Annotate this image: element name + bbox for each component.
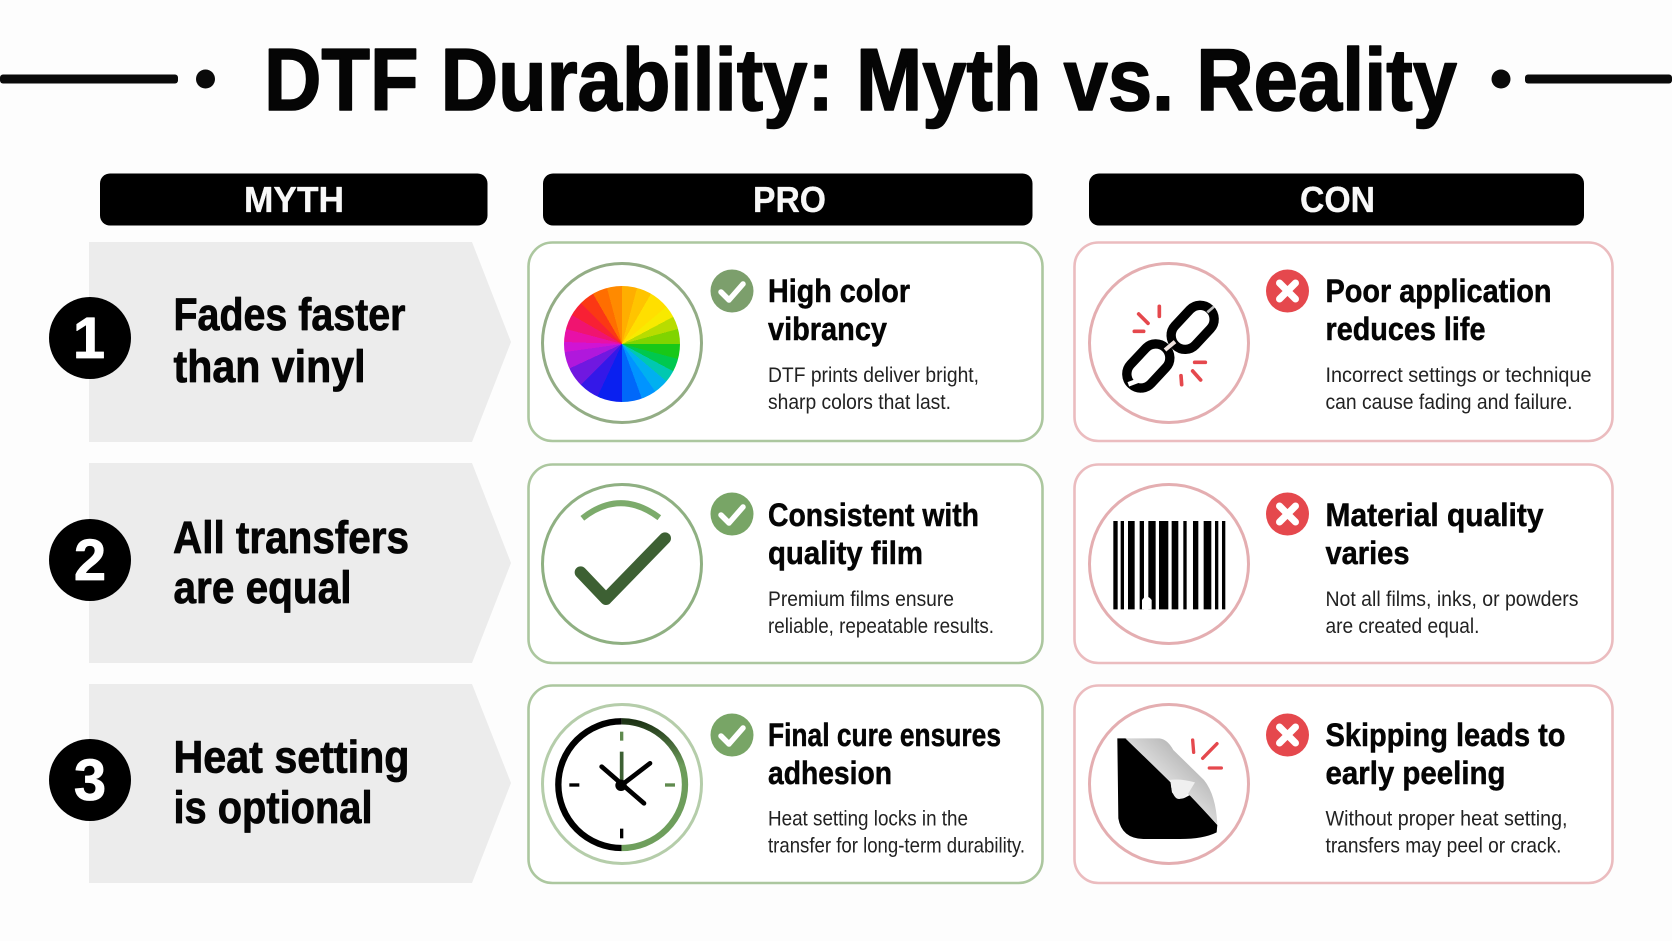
heading: Material quality	[1326, 497, 1544, 533]
number badge 3	[49, 739, 131, 821]
icon: color wheel	[542, 264, 702, 422]
myth text 3	[174, 732, 410, 833]
title with decorative rules: DTF Durability: Myth vs. Reality	[264, 30, 1457, 129]
number badge 1	[49, 297, 131, 379]
heading	[1326, 497, 1544, 571]
heading: quality film	[768, 535, 923, 571]
heading: Poor application	[1326, 273, 1552, 309]
column header: con	[1089, 174, 1584, 226]
description: DTF prints deliver bright,	[768, 364, 979, 387]
icon: check badge	[710, 714, 754, 756]
icon: broken chain	[1090, 264, 1248, 422]
panel: pro 1 high color vibrancy	[528, 242, 1042, 441]
description: transfer for long-term durability.	[768, 834, 1025, 858]
myth text 1: Fades faster	[174, 289, 406, 340]
description: Not all films, inks, or powders	[1326, 588, 1578, 611]
heading	[1326, 717, 1566, 791]
myth row 3	[49, 684, 511, 883]
number badge 1: 1	[73, 306, 105, 371]
description: can cause fading and failure.	[1326, 391, 1572, 414]
icon: check badge	[710, 270, 754, 312]
heading: vibrancy	[768, 311, 887, 347]
panel: con 1 poor application	[1074, 242, 1612, 441]
panel: pro 2 consistent with quality film	[528, 464, 1042, 663]
myth text 2: All transfers	[173, 512, 409, 563]
description	[1326, 808, 1568, 858]
description	[1326, 364, 1592, 414]
icon: check badge	[710, 492, 754, 536]
column header: pro	[543, 174, 1032, 226]
description: reliable, repeatable results.	[768, 615, 994, 638]
description: Incorrect settings or technique	[1326, 364, 1592, 387]
icon: large checkmark	[542, 484, 702, 644]
heading: adhesion	[768, 755, 892, 791]
heading: Final cure ensures	[768, 717, 1001, 753]
heading: High color	[768, 273, 910, 309]
description	[1326, 588, 1578, 638]
icon: peeling transfer	[1090, 704, 1248, 864]
column header: con: CON	[1300, 179, 1375, 220]
column header: myth	[100, 174, 488, 226]
myth text 3: Heat setting	[174, 732, 410, 782]
description: transfers may peel or crack.	[1326, 834, 1562, 858]
panel: pro 3 final cure	[528, 686, 1042, 883]
myth text 2	[173, 512, 409, 613]
panel: con 3 skipping leads to peeling	[1074, 686, 1612, 883]
number badge 3: 3	[74, 748, 106, 813]
heading	[768, 273, 910, 347]
description: Heat setting locks in the	[768, 808, 968, 830]
description: Without proper heat setting,	[1326, 808, 1568, 830]
myth text 2: are equal	[174, 562, 352, 613]
description	[768, 588, 994, 638]
myth row 2	[49, 463, 511, 663]
panel: con 2 material quality varies	[1074, 464, 1612, 663]
number badge 2	[49, 519, 131, 601]
myth text 3: is optional	[174, 782, 372, 833]
heading	[768, 497, 979, 571]
heading: early peeling	[1326, 755, 1506, 791]
heading	[768, 717, 1001, 791]
icon: clock	[542, 704, 702, 864]
icon: barcode	[1090, 484, 1248, 644]
heading: varies	[1326, 535, 1410, 571]
description	[768, 808, 1025, 858]
description	[768, 364, 979, 414]
heading: Skipping leads to	[1326, 717, 1566, 753]
number badge 2: 2	[74, 528, 106, 593]
heading: Consistent with	[768, 497, 979, 533]
heading	[1326, 273, 1552, 347]
icon: x badge	[1266, 714, 1309, 756]
description: sharp colors that last.	[768, 391, 951, 414]
column header: myth: MYTH	[244, 179, 344, 220]
myth text 1: than vinyl	[174, 341, 366, 392]
icon: x badge	[1266, 270, 1309, 312]
heading: reduces life	[1326, 311, 1486, 347]
description: Premium films ensure	[768, 588, 954, 611]
myth text 1	[174, 289, 406, 392]
myth row 1	[49, 242, 511, 442]
column header: pro: PRO	[753, 179, 826, 220]
icon: x badge	[1266, 492, 1309, 536]
description: are created equal.	[1326, 615, 1480, 638]
